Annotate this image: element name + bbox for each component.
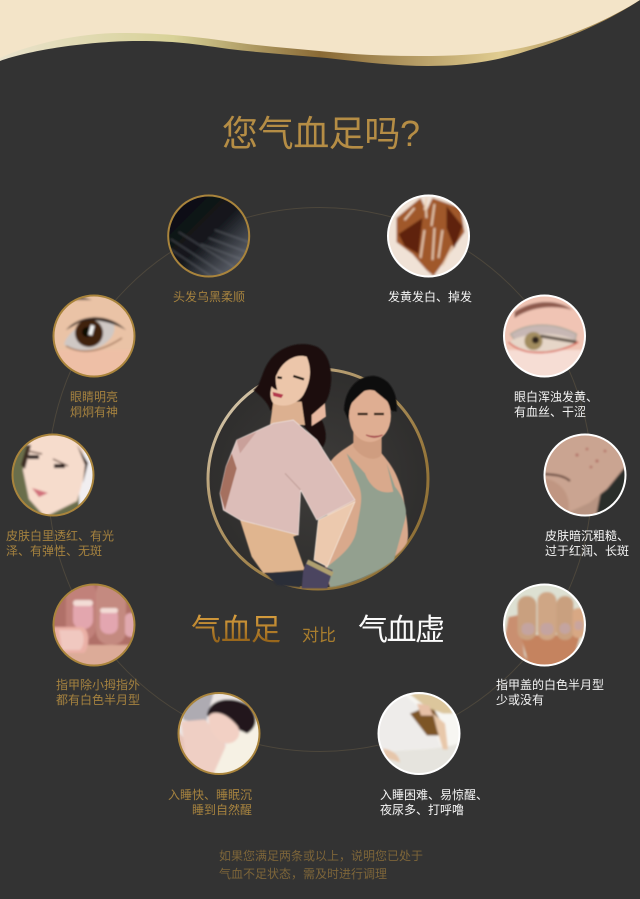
heading: sufficient: 气血足: [191, 614, 281, 647]
label: dull skin: [545, 528, 629, 558]
photo: pale nails: [503, 584, 586, 666]
photo: poor sleep: [378, 692, 460, 775]
photo: good sleep: [178, 692, 260, 775]
header wave: [0, 0, 640, 66]
right woman: [325, 376, 408, 587]
label: fair skin: 泽、有弹性、无斑: [6, 544, 102, 558]
label: good sleep: [168, 788, 252, 817]
label: cloudy eye: 眼白浑浊发黄、: [514, 389, 598, 404]
label: poor sleep: 夜尿多、打呼噜: [380, 802, 464, 817]
photo: dry hair: [387, 194, 470, 278]
footnote: 如果您满足两条或以上，说明您已处于: [219, 848, 423, 863]
label: pale nails: 指甲盖的白色半月型: [496, 677, 604, 692]
label: cloudy eye: [514, 389, 598, 419]
photo: black hair: [167, 194, 250, 278]
central photo: comparison: [208, 344, 428, 589]
photo: cloudy eye: [503, 294, 586, 378]
label: cloudy eye: 有血丝、干涩: [514, 404, 586, 419]
title: 您气血足吗?: [222, 113, 420, 154]
connecting arc: [48, 208, 592, 752]
photo: bright eye: [52, 294, 136, 378]
label: dull skin: 过于红润、长斑: [545, 543, 629, 558]
footnote: 气血不足状态，需及时进行调理: [219, 866, 387, 881]
label: pale nails: 少或没有: [496, 692, 544, 707]
label: healthy nails: 都有白色半月型: [56, 692, 140, 707]
photo: fair skin: [12, 434, 94, 516]
label: bright eye: 炯炯有神: [70, 405, 118, 419]
label: bright eye: 眼睛明亮: [70, 389, 118, 404]
heading: versus: 对比: [302, 626, 336, 645]
label: dull skin: 皮肤暗沉粗糙、: [545, 528, 629, 543]
label: healthy nails: 指甲除小拇指外: [56, 677, 140, 692]
left woman: [220, 344, 355, 588]
label: poor sleep: 入睡困难、易惊醒、: [380, 787, 488, 802]
photo: healthy nails: [52, 584, 136, 666]
label: bright eye: [70, 389, 118, 419]
photo: dull skin: [544, 434, 626, 516]
label: healthy nails: [56, 677, 140, 707]
label: poor sleep: [380, 787, 488, 817]
label: black hair: 头发乌黑柔顺: [173, 289, 245, 304]
label: pale nails: [496, 677, 604, 707]
label: good sleep: 入睡快、睡眠沉: [168, 788, 252, 802]
label: good sleep: 睡到自然醒: [192, 802, 252, 817]
label: fair skin: [6, 528, 114, 558]
footnote: [219, 848, 423, 881]
label: dry hair: 发黄发白、掉发: [388, 289, 472, 304]
label: fair skin: 皮肤白里透红、有光: [6, 528, 114, 543]
heading: deficient: 气血虚: [358, 614, 445, 647]
